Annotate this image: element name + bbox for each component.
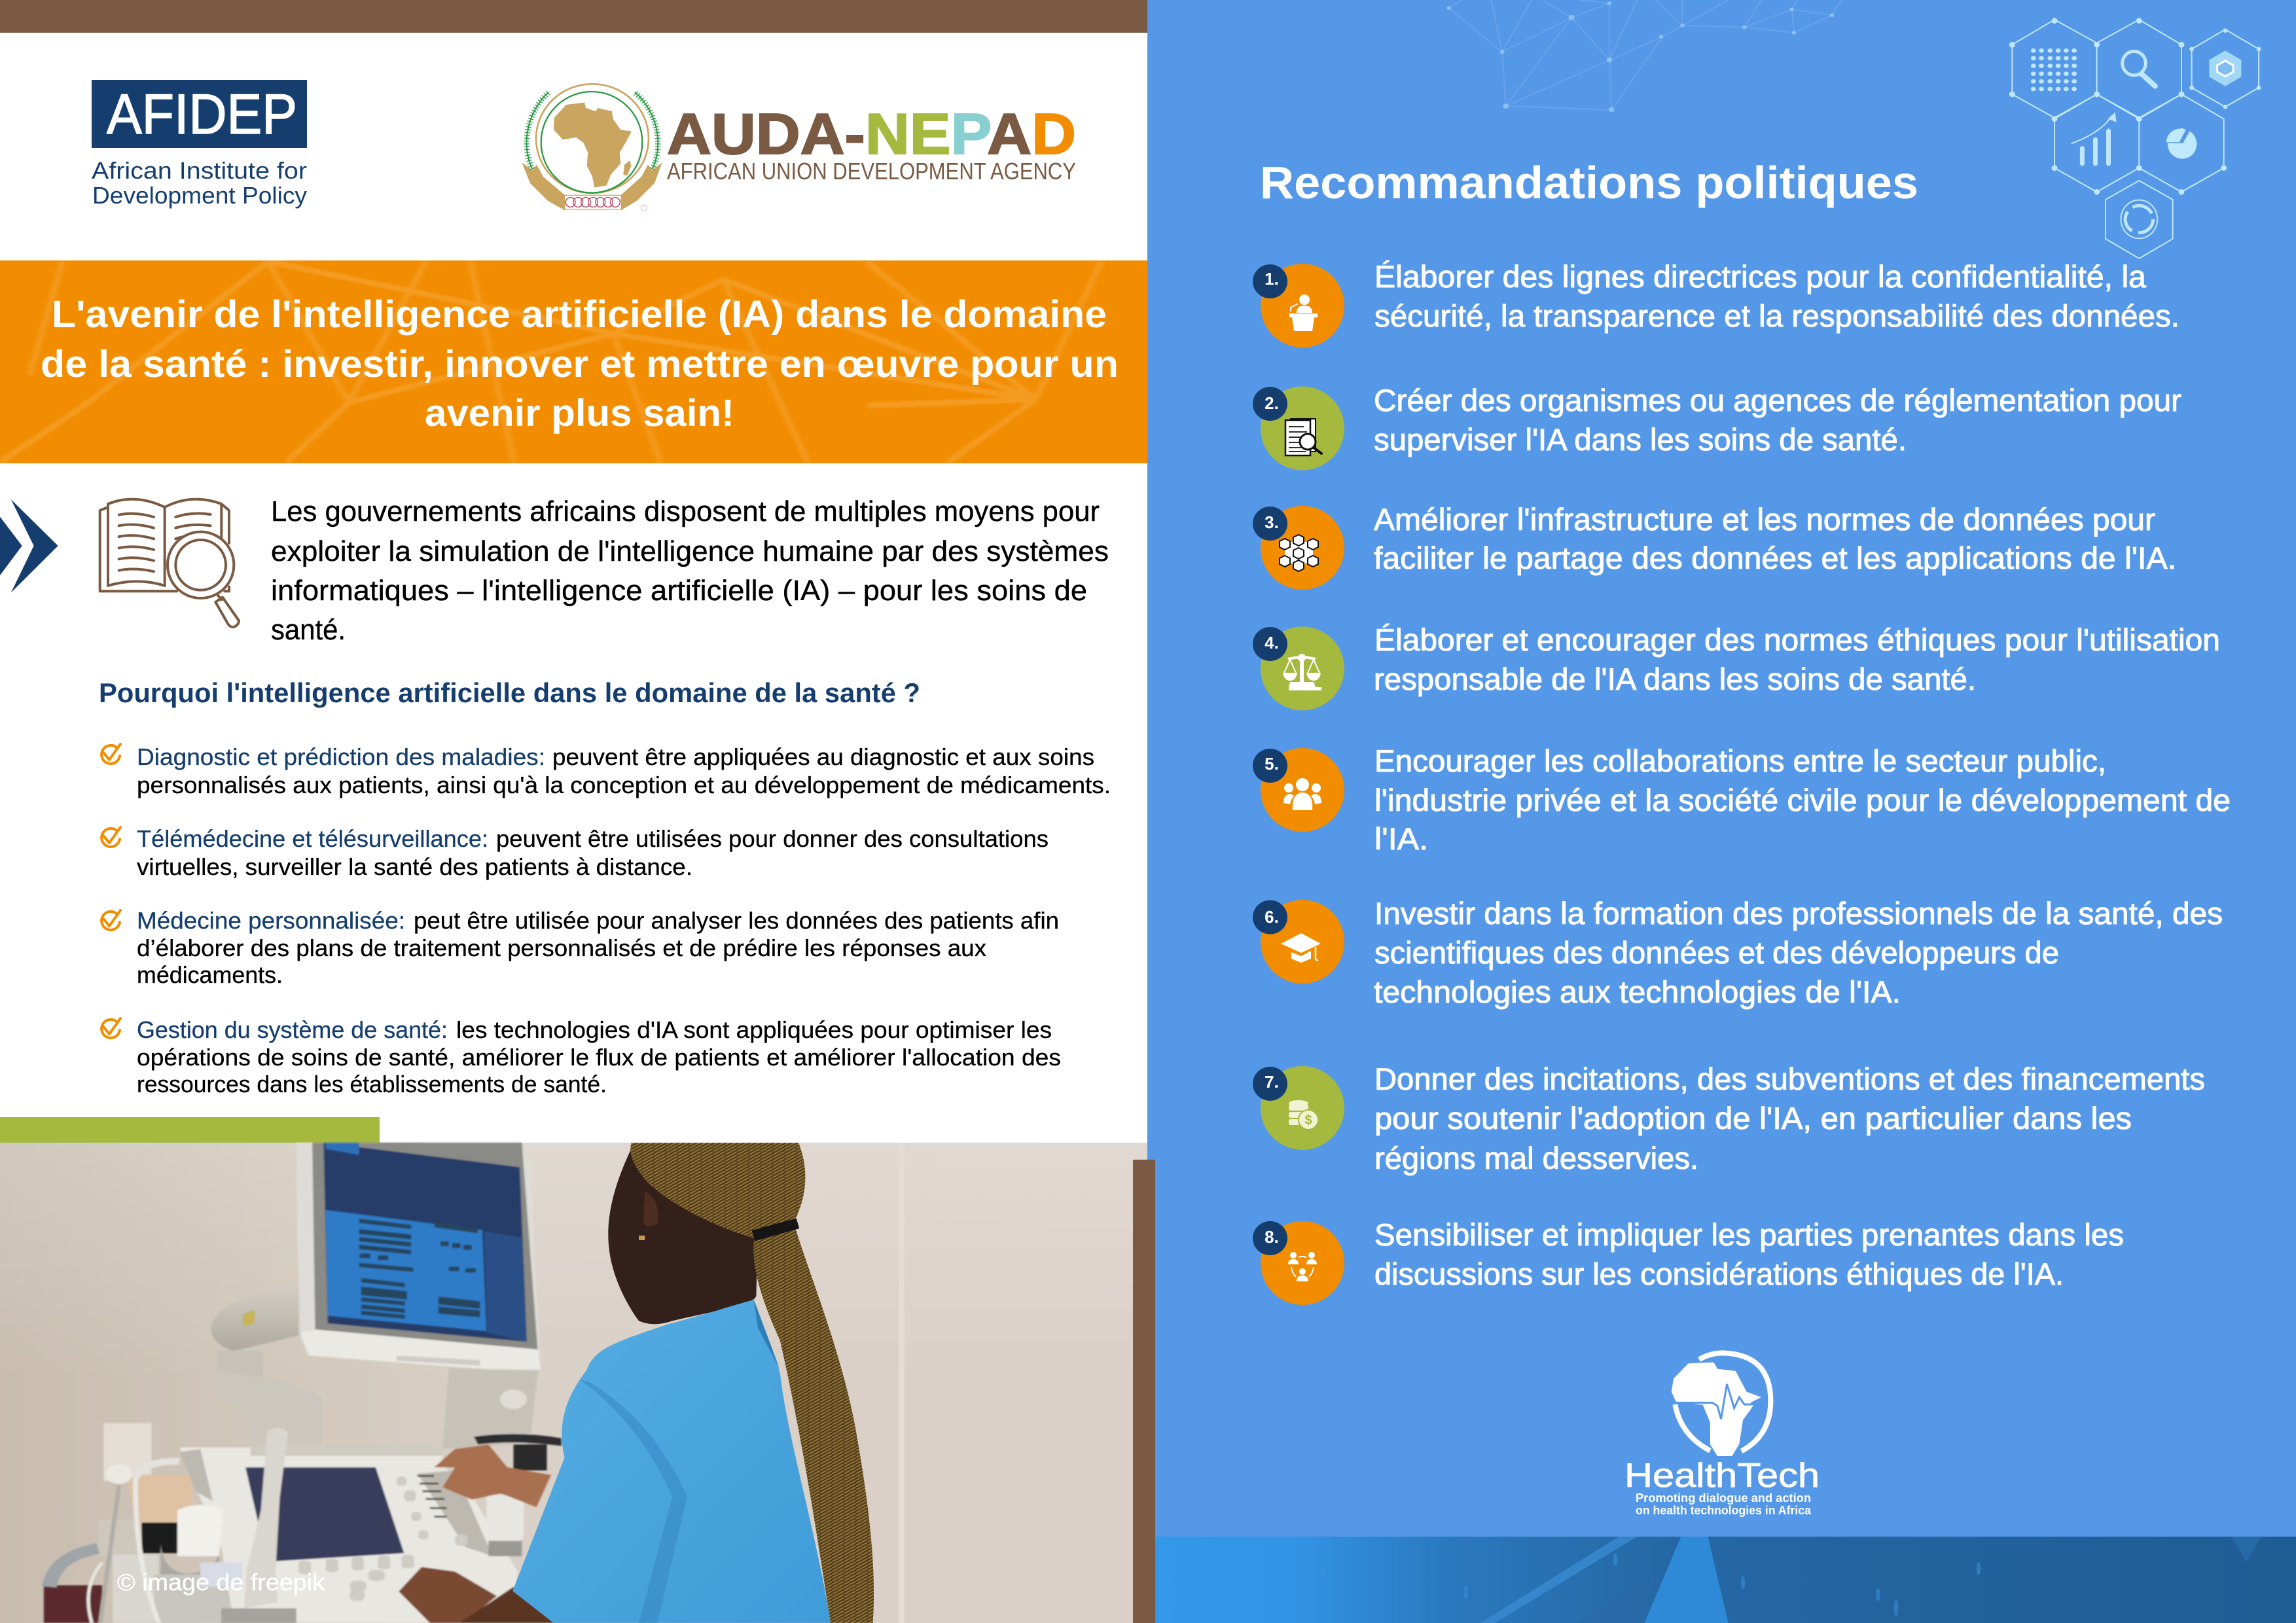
- logo: AFIDEP: [92, 80, 307, 209]
- banner: orange title: [0, 260, 1147, 463]
- icon: coins: [1289, 1100, 1318, 1130]
- icon: double chevron: [0, 499, 58, 593]
- bullet: diagnostic: Diagnostic et prédiction des maladies:: [137, 743, 545, 770]
- recommendation 8: Sensibiliser et impliquer les parties prenantes dans les: [1374, 1217, 2124, 1252]
- bullet: personalised medicine: d’élaborer des plans de traitement personnalisés et de prédire les réponses aux: [137, 935, 986, 961]
- recommendation 4: responsable de l'IA dans les soins de santé.: [1374, 662, 1976, 696]
- recommendation 5: 5.: [1265, 754, 1279, 774]
- recommendation 4: 4.: [1265, 633, 1279, 652]
- panel: right blue background: [1147, 0, 2296, 1623]
- logo: HealthTech: Promoting dialogue and action: [1636, 1491, 1811, 1505]
- recommendation 7: pour soutenir l'adoption de l'IA, en particulier dans les: [1374, 1101, 2132, 1135]
- heading: policy recommendations: Recommandations politiques: [1260, 157, 1918, 208]
- nurse figure: [512, 1143, 874, 1623]
- icon: pie chart: [2166, 128, 2197, 159]
- logo: AFIDEP: Development Policy: [92, 182, 307, 209]
- recommendation 5: [1253, 743, 2231, 856]
- recommendation 5: l'IA.: [1374, 821, 1428, 856]
- network decoration: [1446, 0, 1841, 113]
- bullet: health system management: Gestion du système de santé:: [137, 1016, 448, 1043]
- recommendation 4: [1253, 622, 2220, 711]
- logo: AFIDEP: African Institute for: [92, 157, 307, 184]
- bullet: telemedicine: Télémédecine et télésurveillance:: [137, 825, 488, 852]
- recommendation 7: [1253, 1061, 2205, 1175]
- recommendation 5: l'industrie privée et la société civile pour le développement de: [1374, 783, 2231, 817]
- logo: HealthTech: [1624, 1353, 1820, 1517]
- bullet: telemedicine: virtuelles, surveiller la santé des patients à distance.: [137, 853, 692, 880]
- recommendation 6: [1253, 896, 2223, 1009]
- bullet: diagnostic: [101, 743, 1111, 798]
- logo: HealthTech: HealthTech: [1624, 1457, 1820, 1495]
- recommendation 3: [1253, 502, 2176, 590]
- title text: L'avenir de l'intelligence artificielle (IA) dans le domaine: [52, 293, 1107, 336]
- recommendation 1: [1253, 259, 2179, 348]
- bullet: health system management: [101, 1016, 1061, 1097]
- recommendation 6: scientifiques des données et des développeurs de: [1374, 935, 2059, 970]
- recommendation 4: Élaborer et encourager des normes éthiques pour l'utilisation: [1374, 622, 2220, 657]
- recommendation 1: Élaborer des lignes directrices pour la confidentialité, la: [1374, 259, 2147, 294]
- logo: AUDA-NEPAD wordmark: AFRICAN UNION DEVELOPMENT AGENCY: [667, 158, 1076, 185]
- icon: podium speaker: [1289, 294, 1318, 331]
- bullet: telemedicine: [101, 825, 1049, 880]
- recommendation 1: sécurité, la transparence et la responsabilité des données.: [1374, 298, 2179, 333]
- recommendation 6: technologies aux technologies de l'IA.: [1374, 974, 1901, 1009]
- recommendation 7: 7.: [1265, 1072, 1279, 1092]
- recommendation 8: [1253, 1217, 2124, 1305]
- icon: hexagon badge: [2209, 50, 2241, 86]
- icon: book with magnifier: [100, 499, 239, 627]
- recommendation 2: Créer des organismes ou agences de réglementation pour: [1374, 383, 2181, 418]
- title text: [41, 293, 1119, 435]
- recommendation 6: 6.: [1265, 907, 1279, 927]
- recommendation 2: 2.: [1265, 393, 1279, 413]
- green accent bar: [0, 1117, 380, 1143]
- top brown bar: [0, 0, 1147, 33]
- icon: scales of justice: [1283, 654, 1321, 690]
- recommendation 1: 1.: [1265, 269, 1279, 289]
- recommendation 3: faciliter le partage des données et les applications de l'IA.: [1374, 541, 2176, 575]
- logo: AUDA-NEPAD wordmark: AUDA-NEPAD: [667, 101, 1076, 166]
- logo: AFIDEP: AFIDEP: [107, 83, 297, 146]
- recommendation 2: superviser l'IA dans les soins de santé.: [1374, 422, 1907, 457]
- text: introduction: exploiter la simulation de l'intelligence humaine par des systèmes: [271, 535, 1109, 567]
- title text: de la santé : investir, innover et mettre en œuvre pour un: [41, 343, 1119, 385]
- text: introduction: Les gouvernements africains disposent de multiples moyens pour: [271, 495, 1100, 527]
- ultrasound machine: [44, 1143, 562, 1623]
- icon: group of people: [1283, 778, 1321, 810]
- icon: graduation cap: [1281, 933, 1321, 963]
- recommendation 3: 3.: [1265, 512, 1279, 532]
- text: introduction: informatiques – l'intelligence artificielle (IA) – pour les soins de: [271, 575, 1087, 607]
- bullet: health system management: ressources dans les établissements de santé.: [137, 1071, 607, 1097]
- bullet: telemedicine: peuvent être utilisées pour donner des consultations: [496, 825, 1049, 852]
- icon: magnifier: [2123, 51, 2155, 86]
- icon: document with magnifier: [1285, 419, 1321, 455]
- logo: African Union emblem: [522, 84, 662, 211]
- bullet: personalised medicine: médicaments.: [137, 961, 283, 988]
- bullet: health system management: opérations de soins de santé, améliorer le flux de patients et améliorer l'allocation des: [137, 1044, 1061, 1071]
- bullet: personalised medicine: Médecine personnalisée:: [137, 907, 405, 934]
- text: introduction: santé.: [271, 614, 346, 646]
- icon: bar chart with arrow: [2072, 113, 2117, 164]
- bullet: diagnostic: personnalisés aux patients, ainsi qu'à la conception et au développement de médicaments.: [137, 772, 1111, 798]
- recommendation 3: Améliorer l'infrastructure et les normes de données pour: [1374, 502, 2155, 537]
- logo: HealthTech: on health technologies in Africa: [1636, 1504, 1812, 1517]
- recommendation 6: Investir dans la formation des professionnels de la santé, des: [1374, 896, 2223, 931]
- recommendation 7: Donner des incitations, des subventions et des financements: [1374, 1061, 2205, 1096]
- bullet: personalised medicine: [101, 907, 1059, 988]
- recommendation 8: 8.: [1265, 1227, 1279, 1247]
- title text: avenir plus sain!: [425, 392, 734, 435]
- icon: ring: [2121, 200, 2157, 238]
- icon: blockchain network: [1280, 535, 1318, 571]
- photo: nurse at ultrasound machine: [0, 1143, 1155, 1623]
- recommendation 8: discussions sur les considérations éthiques de l'IA.: [1374, 1257, 2064, 1291]
- brown vertical bar: [1133, 1160, 1155, 1623]
- icon: dot matrix: [2031, 48, 2077, 91]
- bullet: health system management: les technologies d'IA sont appliquées pour optimiser les: [456, 1016, 1052, 1043]
- icon: connected people: [1288, 1252, 1317, 1281]
- bullet: diagnostic: peuvent être appliquées au diagnostic et aux soins: [552, 743, 1094, 770]
- photo credit: © image de freepik: [117, 1569, 325, 1596]
- recommendation 2: [1253, 383, 2181, 470]
- icon: coins: $: [1304, 1113, 1312, 1128]
- text: introduction: [271, 495, 1109, 646]
- icon cluster: data hexagons: [2009, 18, 2261, 259]
- bottom blue gradient band: [1155, 1537, 2296, 1623]
- panel: page background left: [0, 0, 1147, 1623]
- recommendation 5: Encourager les collaborations entre le secteur public,: [1374, 743, 2106, 778]
- heading: why AI in health: Pourquoi l'intelligence artificielle dans le domaine de la santé ?: [99, 677, 920, 708]
- recommendation 7: régions mal desservies.: [1374, 1141, 1698, 1175]
- bullet: personalised medicine: peut être utilisée pour analyser les données des patients afin: [414, 907, 1059, 934]
